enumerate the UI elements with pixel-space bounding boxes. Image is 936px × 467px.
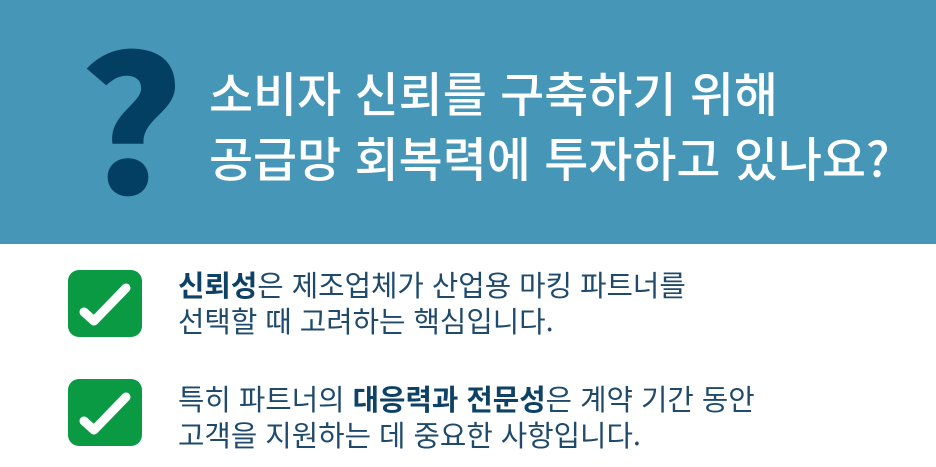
icon: check 1 bbox=[68, 270, 142, 337]
icon: check 2 bbox=[68, 379, 142, 446]
text block 2 line 1: 특히 파트너의 대응력과 전문성은 계약 기간 동안 bbox=[178, 378, 755, 419]
text block 1 line 2: 선택할 때 고려하는 핵심입니다. bbox=[178, 300, 554, 341]
heading line 1: 소비자 신뢰를 구축하기 위해 bbox=[209, 56, 778, 126]
text block 1 line 1: 신뢰성은 제조업체가 산업용 마킹 파트너를 bbox=[178, 264, 686, 305]
text block 2 line 2: 고객을 지원하는 데 중요한 사항입니다. bbox=[178, 414, 641, 455]
panel: header banner bbox=[0, 0, 936, 244]
heading line 2: 공급망 회복력에 투자하고 있나요? bbox=[209, 121, 890, 191]
